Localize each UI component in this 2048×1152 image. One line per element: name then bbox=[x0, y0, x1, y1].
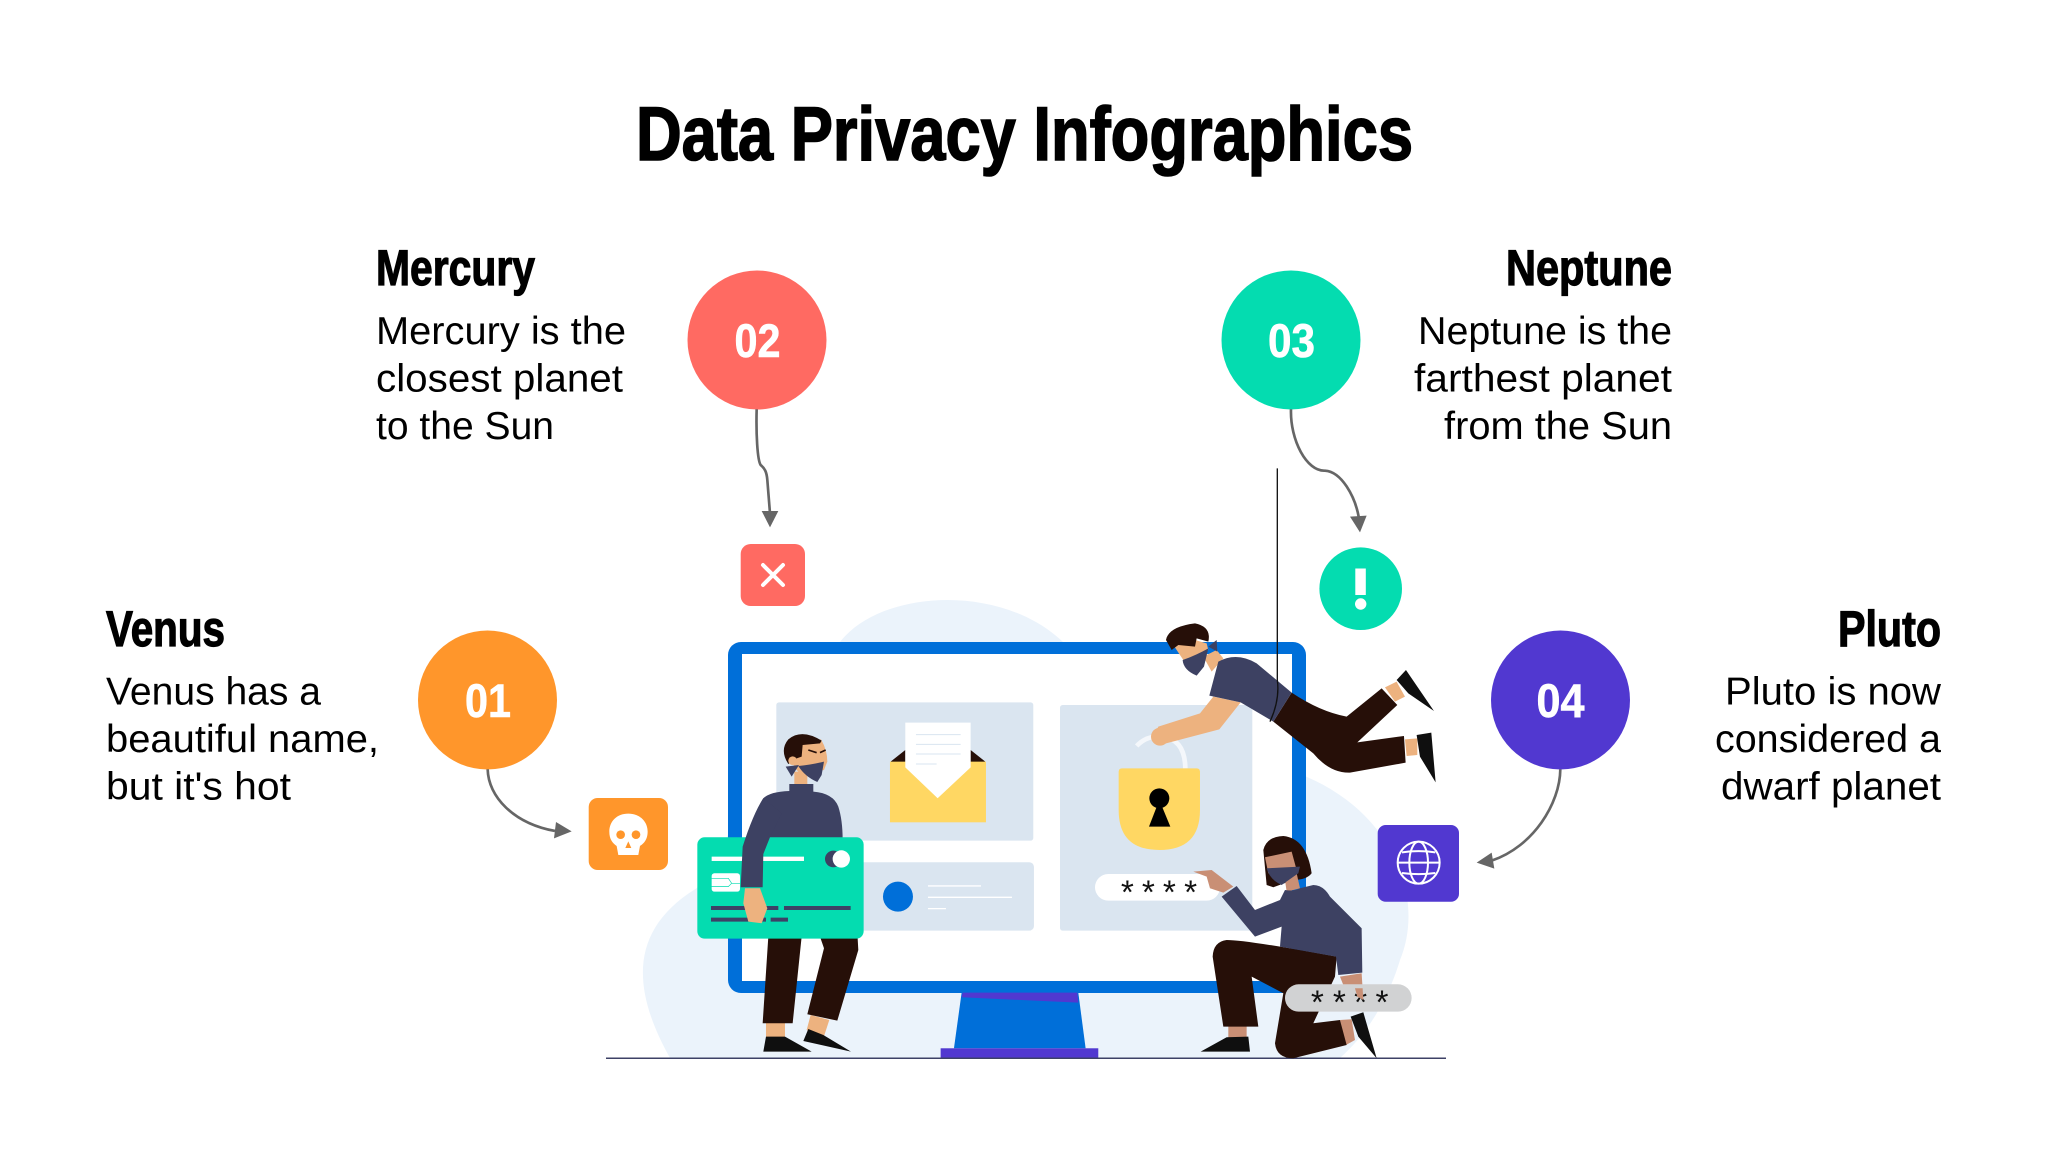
screen panel: profile row bbox=[776, 862, 1034, 931]
password field: grey: * bbox=[1354, 985, 1367, 1022]
number circle 02: 02 bbox=[734, 314, 780, 367]
number circle 03 bbox=[1222, 270, 1360, 410]
text block: Pluto: Pluto bbox=[1838, 601, 1941, 657]
password field: grey bbox=[1285, 984, 1412, 1022]
rope bbox=[1270, 468, 1278, 722]
text block: Mercury: to the Sun bbox=[376, 405, 554, 448]
number circle 03: 03 bbox=[1268, 314, 1315, 367]
icon: skull bbox=[589, 798, 668, 870]
text block: Venus: but it's hot bbox=[106, 766, 291, 808]
text block: Neptune bbox=[1414, 240, 1672, 448]
text block: Pluto bbox=[1715, 601, 1942, 808]
icon: globe bbox=[1378, 825, 1459, 902]
icon: exclamation bbox=[1319, 547, 1402, 630]
number circle 04 bbox=[1491, 630, 1630, 770]
background blob bbox=[643, 600, 1408, 1058]
text block: Mercury: Mercury is the bbox=[376, 310, 626, 353]
credit card bbox=[697, 837, 864, 939]
arrow: 03 to exclamation bbox=[1291, 409, 1367, 532]
password field: grey: * bbox=[1375, 985, 1388, 1022]
number circle 02 bbox=[688, 270, 826, 410]
text block: Mercury: closest planet bbox=[376, 358, 623, 400]
text block: Pluto: Pluto is now bbox=[1725, 670, 1942, 714]
text block: Venus: beautiful name, bbox=[106, 718, 379, 761]
arrow: 02 to cross bbox=[756, 409, 778, 527]
screen panel: padlock and password: * bbox=[1121, 875, 1134, 912]
text block: Neptune: Neptune is the bbox=[1418, 310, 1672, 353]
person: man with credit card bbox=[697, 734, 864, 1052]
text block: Venus bbox=[106, 601, 379, 808]
person: kneeling woman with password bbox=[1193, 836, 1412, 1058]
screen panel: padlock and password bbox=[1060, 705, 1252, 931]
monitor bbox=[728, 642, 1306, 1058]
number circle 04: 04 bbox=[1536, 674, 1584, 727]
password field: grey: * bbox=[1311, 985, 1324, 1022]
number circle 01 bbox=[418, 630, 557, 770]
screen panel: padlock and password: * bbox=[1163, 875, 1176, 912]
text block: Neptune: farthest planet bbox=[1414, 358, 1672, 400]
text block: Venus: Venus bbox=[106, 601, 225, 657]
text block: Pluto: considered a bbox=[1715, 718, 1941, 761]
person: flying man with rope bbox=[1151, 468, 1436, 782]
text block: Neptune: Neptune bbox=[1506, 240, 1672, 296]
text block: Mercury bbox=[376, 240, 626, 448]
icon: cross bbox=[741, 544, 805, 606]
ground line bbox=[606, 1058, 1446, 1059]
arrow: 01 to skull bbox=[488, 769, 572, 838]
screen panel: envelope bbox=[776, 702, 1033, 841]
number circle 01: 01 bbox=[465, 674, 511, 727]
text block: Mercury: Mercury bbox=[376, 240, 535, 296]
arrow: 04 to globe bbox=[1477, 769, 1560, 869]
title: Data Privacy Infographics bbox=[636, 92, 1413, 177]
password field: grey: * bbox=[1333, 985, 1346, 1022]
screen panel: padlock and password: * bbox=[1142, 875, 1155, 912]
text block: Neptune: from the Sun bbox=[1444, 405, 1672, 448]
text block: Pluto: dwarf planet bbox=[1721, 766, 1941, 808]
screen panel: padlock and password: * bbox=[1184, 875, 1197, 912]
text block: Venus: Venus has a bbox=[106, 670, 321, 714]
